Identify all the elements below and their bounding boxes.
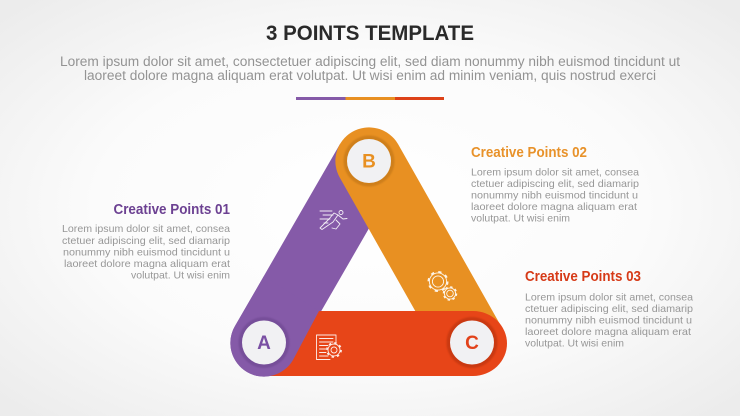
node C: C	[465, 333, 479, 354]
heading 01: Creative Points 01	[114, 202, 230, 218]
tricolor divider	[296, 97, 444, 100]
icon: document with gear	[316, 335, 341, 360]
orange band	[335, 127, 501, 360]
subtitle text: Lorem ipsum dolor sit amet, consectetuer adipiscing elit, sed diam nonummy nibh euismod tincidunt ut	[60, 54, 680, 69]
body 03: volutpat. Ut wisi enim	[525, 338, 624, 350]
body 02: ctetuer adipiscing elit, sed diamarip	[471, 179, 639, 190]
body 03: laoreet dolore magna aliquam erat	[525, 327, 691, 338]
body 01: laoreet dolore magna aliquam erat	[64, 259, 230, 270]
body 03	[525, 292, 693, 350]
icon: running person	[320, 210, 347, 230]
body 01: ctetuer adipiscing elit, sed diamarip	[62, 236, 230, 247]
point 03 text block	[525, 269, 693, 350]
icon: gears	[428, 272, 456, 300]
node B	[344, 136, 394, 186]
body 02: nonummy nibh euismod tincidunt u	[471, 190, 638, 202]
body 01: volutpat. Ut wisi enim	[131, 270, 230, 282]
body 01: nonummy nibh euismod tincidunt u	[63, 248, 230, 258]
node A	[238, 317, 290, 368]
body 02: laoreet dolore magna aliquam erat	[471, 202, 637, 213]
subtitle text: laoreet dolore magna aliquam erat volutpat. Ut wisi enim ad minim veniam, quis nostrud exerci	[84, 68, 656, 83]
heading 03: Creative Points 03	[525, 269, 641, 285]
body 02	[471, 168, 639, 224]
body 03: Lorem ipsum dolor sit amet, consea	[525, 292, 693, 304]
point 02 text block	[471, 145, 639, 224]
red band	[264, 311, 507, 376]
node A: A	[257, 333, 271, 354]
body 02: Lorem ipsum dolor sit amet, consea	[471, 168, 639, 178]
body 01	[62, 224, 230, 282]
purple band end over red	[230, 276, 319, 377]
node C	[446, 317, 498, 368]
purple band	[230, 144, 398, 377]
subtitle text	[60, 54, 680, 83]
heading 02: Creative Points 02	[471, 145, 587, 161]
body 01: Lorem ipsum dolor sit amet, consea	[62, 224, 230, 235]
point 01 text block	[62, 202, 230, 282]
body 02: volutpat. Ut wisi enim	[471, 214, 570, 224]
body 03: ctetuer adipiscing elit, sed diamarip	[525, 304, 693, 315]
body 03: nonummy nibh euismod tincidunt u	[525, 316, 692, 326]
triangle diagram	[230, 127, 507, 377]
title: 3 POINTS TEMPLATE	[266, 21, 474, 45]
node B: B	[362, 152, 376, 172]
